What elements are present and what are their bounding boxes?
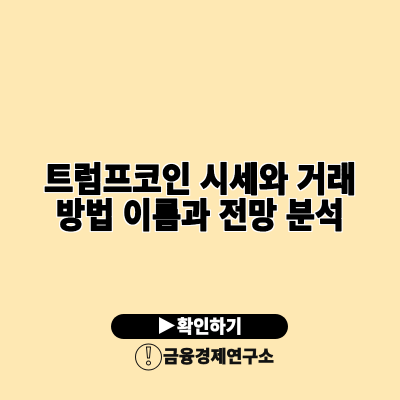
icon: play triangle <box>159 317 175 334</box>
icon: exclamation circle <box>136 344 162 370</box>
title: 트럼프코인 시세와 거래 <box>44 162 356 200</box>
title: 방법 이름과 전망 분석 <box>56 198 344 236</box>
title <box>44 162 356 236</box>
brand logo <box>136 344 274 370</box>
button <box>111 314 288 339</box>
brand name: 금융경제연구소 <box>163 348 274 366</box>
button: 확인하기 <box>177 316 242 337</box>
